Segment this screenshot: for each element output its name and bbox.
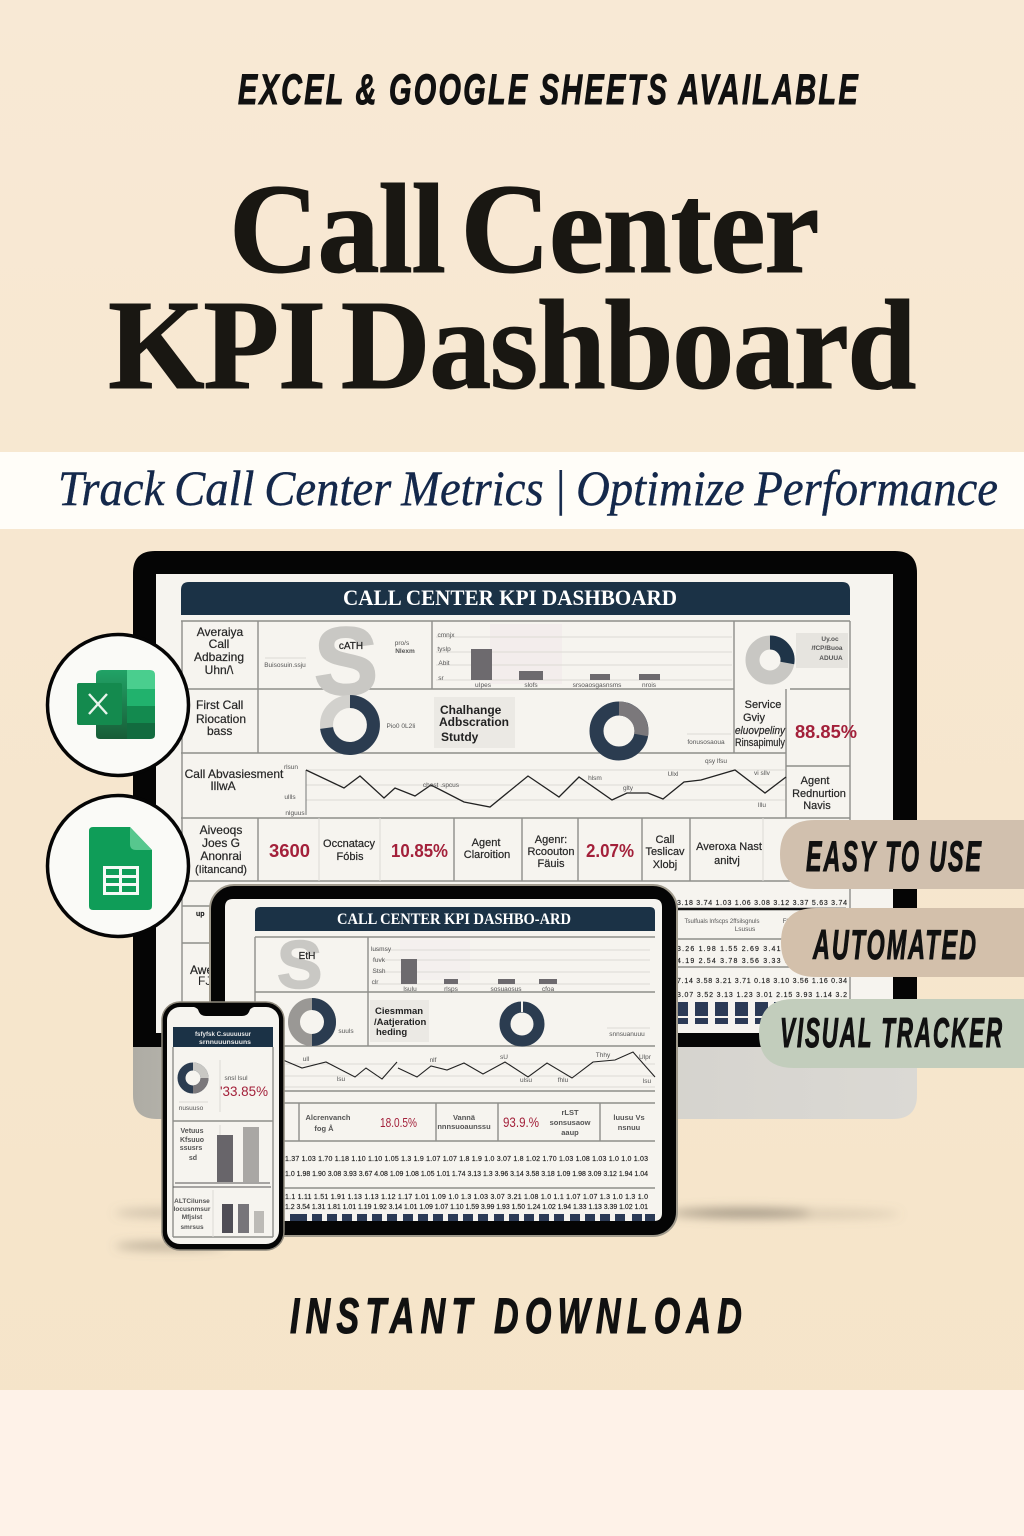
service quality label: eluovpeliny — [735, 725, 786, 737]
phone grid — [173, 1047, 273, 1237]
laptop frame — [133, 551, 917, 1047]
dashboard header — [181, 582, 850, 615]
bar chart: tyslp — [437, 646, 451, 653]
KPI row: anitvj — [714, 855, 740, 867]
tablet bar chart: fuvk — [373, 957, 386, 964]
lower table — [182, 900, 850, 1024]
line chart: nlguus — [285, 810, 305, 817]
phone bar chart 1: Vetuus — [181, 1128, 204, 1135]
challenge box — [434, 697, 515, 748]
dashboard header: CALL CENTER KPI DASHBOARD — [343, 585, 677, 610]
tablet header: CALL CENTER KPI DASHBO-ARD — [337, 911, 571, 928]
tablet line chart: ull — [303, 1056, 310, 1063]
dashboard grid — [181, 621, 850, 1030]
phone bar chart 1: sd — [189, 1155, 197, 1162]
KPI big S: S — [314, 608, 378, 715]
agent reduction label: Rednurtion — [792, 788, 846, 800]
line chart: vi sllv — [754, 770, 771, 777]
line chart: Ulxl — [668, 771, 679, 778]
tablet S: S — [277, 927, 322, 1003]
KPI row: Agent — [472, 837, 500, 849]
phone percent — [220, 1075, 268, 1099]
tablet header — [255, 907, 655, 931]
device shadows — [115, 1208, 900, 1250]
lower table: 7.14 3.58 3.21 3.71 0.18 3.10 3.56 1.16 0.34 — [677, 978, 847, 985]
donut note: /fCP/Buoa — [811, 645, 843, 652]
tablet text box: Ciesmman — [375, 1006, 423, 1017]
tablet KPI row: 93.9.% — [503, 1114, 539, 1130]
bar chart — [436, 624, 732, 689]
lower table: 4.19 2.54 3.78 3.56 3.33 3.9 — [677, 958, 797, 965]
donut note: Uy.oc — [821, 636, 839, 643]
average call label: Uhn/\ — [205, 663, 234, 677]
excel badge — [48, 634, 188, 776]
phone percent: snsl lsul — [224, 1075, 248, 1082]
tablet bar chart: rlsps — [444, 986, 459, 993]
agent reduction label — [792, 775, 846, 812]
tablet line chart: fhlu — [558, 1077, 569, 1084]
phone — [162, 1002, 284, 1250]
phone donut: nusuuso — [179, 1105, 204, 1112]
donut top right — [752, 642, 788, 678]
S caption: Buisosuin.ssju — [264, 662, 306, 669]
phone bar chart 2: Mfjslst — [182, 1214, 203, 1221]
bar chart: uIpes — [475, 682, 492, 689]
bar chart: sr — [438, 675, 445, 682]
service quality label: Gviy — [743, 712, 766, 724]
tablet line chart: ulsu — [520, 1077, 532, 1084]
tablet KPI row: luusu Vs — [613, 1113, 645, 1122]
tablet KPI row: sonsusaow — [550, 1118, 591, 1127]
laptop chin — [133, 1040, 917, 1119]
tablet bar chart: clr — [372, 979, 379, 986]
phone screen — [167, 1007, 279, 1244]
tablet number table: 1.37 1.03 1.70 1.18 1.10 1.10 1.05 1.3 1.9 1.07 1.07 1.8 1.9 1.0 3.07 1.8 1.02 1.70 1.03 1.08 1.03 1.0 1.0 1.03 — [285, 1156, 648, 1163]
tablet number table: 1.0 1.98 1.90 3.08 3.93 3.67 4.08 1.09 1.08 1.05 1.01 1.74 3.13 1.3 3.96 3.14 3.58 3.18 1.09 1.98 3.09 3.12 1.94 1.04 — [285, 1171, 648, 1178]
bar chart: nrois — [642, 682, 657, 689]
tablet line chart: nlf — [430, 1057, 437, 1064]
KPI row: Aiveoqs — [200, 823, 242, 837]
bar chart: Abit — [438, 660, 450, 667]
KPI row: Occnatacy — [323, 838, 375, 850]
tablet donut left: suuls — [338, 1028, 354, 1035]
tablet line chart: sU — [500, 1054, 508, 1061]
laptop — [133, 551, 917, 1119]
challenge box: Chalhange — [440, 703, 502, 717]
lower table: 3.07 3.52 3.13 1.23 3.01 2.15 3.93 1.14 3.2 — [677, 992, 847, 999]
average call label: Call — [209, 637, 229, 651]
tablet S: EtH — [299, 951, 315, 962]
title: Call Center — [229, 158, 818, 300]
bottom band — [0, 1390, 1024, 1536]
lower table: Fl.0sf — [783, 919, 798, 925]
tablet S — [278, 940, 320, 990]
tablet — [210, 885, 677, 1236]
line chart: rlsun — [284, 764, 298, 771]
tablet KPI row: nnnsuoaunssu — [437, 1122, 491, 1131]
phone header: fsfyfsk C.suuuusur — [195, 1031, 251, 1038]
tablet donut left — [294, 1004, 354, 1040]
phone percent: '33.85% — [220, 1083, 268, 1099]
call abandonment label: IllwA — [210, 779, 236, 793]
tablet text box: heding — [376, 1027, 407, 1038]
tablet KPI row: 18.0.5% — [380, 1115, 417, 1130]
tablet bar chart: lsulu — [403, 986, 417, 993]
tablet donut right — [505, 1001, 650, 1041]
KPI row: Rcoouton — [527, 846, 575, 858]
phone bar chart 1 — [180, 1127, 259, 1182]
S caption: Nlexm — [395, 648, 415, 655]
pill: easy to use — [780, 820, 1024, 889]
bar chart: srsoaosgasnsms — [573, 682, 622, 689]
KPI row: 10.85% — [391, 841, 448, 861]
phone header — [173, 1027, 273, 1047]
tablet line chart: Thhy — [596, 1052, 611, 1059]
KPI row: Agenr: — [535, 834, 567, 846]
tablet frame — [210, 885, 677, 1236]
KPI row: Teslicav — [645, 846, 685, 858]
icon: excel — [77, 670, 155, 739]
title: KPI Dashboard — [108, 274, 915, 416]
phone header: srnnuuunsuuns — [199, 1039, 251, 1046]
agent reduction label: Navis — [803, 800, 831, 812]
line chart: ullls — [284, 794, 296, 801]
phone bar chart 1: ssusrs — [180, 1145, 202, 1152]
KPI row — [195, 823, 762, 876]
donut first call — [326, 702, 415, 748]
pill: automated — [781, 908, 1024, 977]
call abandonment label: Call Abvasiesment — [185, 767, 284, 781]
KPI row: 2.07% — [586, 841, 634, 861]
status blocks — [678, 1002, 787, 1024]
KPI row: Joes G — [202, 836, 240, 850]
KPI row: Call — [656, 834, 674, 846]
tablet number table: 1.1 1.11 1.51 1.91 1.13 1.13 1.12 1.17 1.01 1.09 1.0 1.3 1.03 3.07 3.21 1.08 1.0 1.1 1.07 1.07 1.3 1.0 1.3 1.0 — [285, 1194, 648, 1201]
KPI row: Averoxa Nast — [696, 841, 762, 853]
phone bar chart 2: ALTCilunse — [174, 1198, 210, 1205]
tablet number table — [285, 1156, 655, 1221]
tablet donut right: snnsuanuuu — [609, 1031, 645, 1038]
service quality label — [735, 699, 786, 749]
tablet bar chart — [371, 940, 650, 993]
S caption — [264, 640, 415, 669]
tablet text box: /Aatjeration — [374, 1017, 426, 1028]
donut note: ADUUA — [819, 655, 843, 662]
challenge box: Adbscration — [439, 715, 509, 729]
bar chart: slofs — [524, 682, 538, 689]
donut center — [596, 708, 731, 754]
average call label — [194, 625, 244, 677]
first call label: bass — [207, 724, 232, 738]
first call label: First Call — [196, 698, 243, 712]
tablet bar chart: lusmsy — [371, 946, 392, 953]
tablet line chart — [282, 1052, 655, 1087]
S caption: cATH — [339, 641, 363, 652]
KPI row: Claroition — [464, 849, 510, 861]
tablet number table: 1.2 3.54 1.31 1.81 1.01 1.19 1.92 3.14 1.01 1.09 1.07 1.10 1.59 3.99 1.93 1.50 1.24 1.02 1.94 1.33 1.13 3.39 1.02 1.01 — [285, 1204, 648, 1211]
phone donut — [179, 1066, 208, 1112]
subtitle banner — [0, 452, 1024, 529]
S caption: pro/s — [395, 640, 410, 647]
phone bar chart 2 — [174, 1198, 264, 1233]
tablet screen — [225, 899, 662, 1221]
line chart: glty — [623, 785, 634, 792]
donut first call: Pio0 0L2Ii — [387, 723, 415, 730]
sheets badge — [48, 796, 188, 936]
KPI row: Fóbis — [337, 851, 364, 863]
service quality label: Service — [745, 699, 781, 711]
service quality label: Rinsapimuly — [735, 737, 785, 749]
average call label: Averaiya — [197, 625, 244, 639]
instant download: INSTANT DOWNLOAD — [290, 1288, 748, 1344]
lower table: 3.26 1.98 1.55 2.69 3.41 3.1 — [677, 946, 797, 953]
phone bar chart 2: locusnmsur — [174, 1206, 211, 1213]
tablet line chart: Ulpr — [639, 1054, 652, 1061]
tablet bar chart: sosuaosus — [490, 986, 522, 993]
tablet KPI row: nsnuu — [618, 1123, 641, 1132]
lower table: FJ — [198, 974, 211, 988]
tablet line chart: lsu — [337, 1076, 346, 1083]
KPI row: Fäuis — [538, 858, 565, 870]
line chart — [284, 758, 786, 817]
lower table: Awe — [190, 963, 213, 977]
title — [108, 158, 915, 416]
line chart: qsy lfsu — [705, 758, 727, 765]
KPI row: (Iitancand) — [195, 864, 247, 876]
donut center: fonusosaoua — [687, 739, 725, 746]
tablet grid — [255, 937, 655, 1188]
line chart: hlsm — [588, 775, 602, 782]
lower table: Tsulfuals lnfscps 2ffsilsgnuls — [685, 919, 759, 925]
icon: google sheets — [89, 827, 152, 910]
first call label: Riocation — [196, 712, 246, 726]
tablet bar chart: cfoa — [542, 986, 555, 993]
tablet text box — [370, 1000, 429, 1042]
tablet KPI row: rLST — [561, 1108, 579, 1117]
challenge box: Stutdy — [441, 730, 479, 744]
donut note — [796, 633, 848, 668]
call abandonment label — [185, 767, 284, 793]
tablet KPI row: aaup — [561, 1128, 579, 1137]
bar chart: cmnjx — [438, 632, 455, 639]
phone frame — [162, 1002, 284, 1250]
KPI row: Xlobj — [653, 859, 677, 871]
tablet KPI row — [305, 1108, 645, 1137]
pill: visual tracker — [759, 999, 1024, 1068]
tablet bar chart: Stsh — [372, 968, 386, 975]
first call label — [196, 698, 246, 738]
tablet status blocks — [290, 1214, 655, 1221]
tablet KPI row: Vannä — [453, 1113, 476, 1122]
phone bar chart 1: Kfsuuo — [180, 1137, 204, 1144]
laptop screen — [156, 574, 893, 1033]
tablet KPI row: Alcrenvanch — [305, 1113, 351, 1122]
phone bar chart 2: smrsus — [180, 1224, 204, 1231]
tablet KPI row: fog Å — [314, 1124, 334, 1133]
line chart: lllu — [758, 802, 766, 809]
tablet line chart: lsu — [643, 1078, 652, 1085]
phone notch — [194, 1007, 254, 1016]
lower table: up — [196, 911, 205, 918]
KPI row: 3600 — [269, 841, 310, 861]
lower table: 3.18 3.74 1.03 1.06 3.08 3.12 3.37 5.63 3.74 — [677, 900, 847, 907]
percent 88.85: 88.85% — [795, 722, 857, 742]
agent reduction label: Agent — [801, 775, 829, 787]
average call label: Adbazing — [194, 650, 244, 664]
KPI row: Anonrai — [200, 849, 242, 863]
line chart: chost .spcus — [423, 782, 460, 789]
lower table: Lsusus — [735, 926, 756, 933]
